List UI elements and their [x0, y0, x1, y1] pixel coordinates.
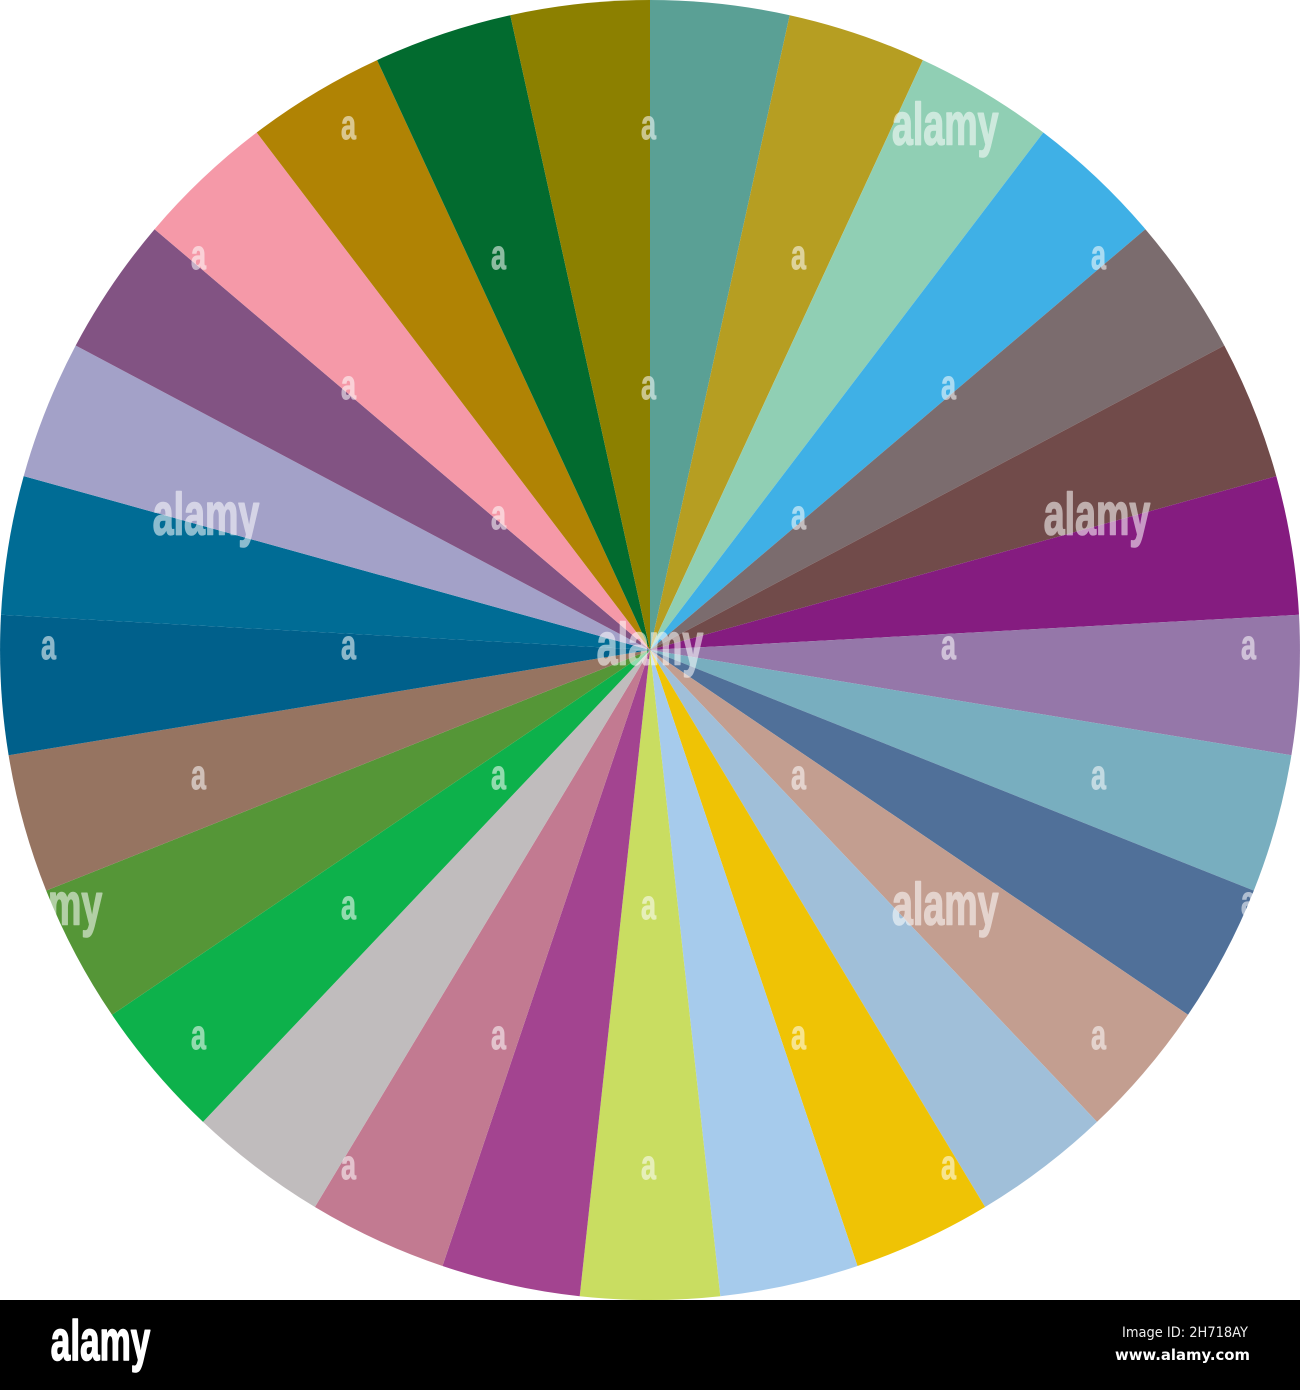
small watermark letters: a [791, 1011, 806, 1058]
small watermark letters: a [941, 621, 956, 668]
small watermark letters: a [941, 1141, 956, 1188]
small watermark letters [41, 101, 1256, 1188]
small watermark letters: a [791, 491, 806, 538]
small watermark letters: a [1091, 231, 1106, 278]
large watermark wordmarks: alamy [0, 872, 102, 938]
small watermark letters: a [641, 101, 656, 148]
small watermark letters: a [791, 231, 806, 278]
large watermark wordmarks: alamy [892, 872, 999, 938]
small watermark letters: a [641, 361, 656, 408]
small watermark letters: a [341, 361, 356, 408]
small watermark letters: a [941, 361, 956, 408]
large watermark wordmarks: alamy [1044, 482, 1150, 548]
large watermark wordmarks: alamy [892, 92, 999, 158]
large watermark wordmarks [0, 92, 1150, 938]
small watermark letters: a [491, 1011, 506, 1058]
website url: www.alamy.com [1115, 1346, 1250, 1364]
small watermark letters: a [341, 881, 356, 928]
small watermark letters: a [491, 491, 506, 538]
small watermark letters: a [491, 751, 506, 798]
small watermark letters: a [491, 231, 506, 278]
small watermark letters: a [641, 1141, 656, 1188]
large watermark wordmarks: alamy [153, 482, 259, 548]
small watermark letters: a [1091, 751, 1106, 798]
small watermark letters: a [341, 1141, 356, 1188]
image id: Image ID: 2H718AY [1122, 1325, 1248, 1341]
small watermark letters: a [191, 751, 206, 798]
small watermark letters: a [341, 101, 356, 148]
small watermark letters: a [41, 621, 56, 668]
footer bar [0, 1300, 1300, 1390]
small watermark letters: a [1241, 621, 1256, 668]
small watermark letters: a [341, 621, 356, 668]
small watermark letters: a [1241, 877, 1256, 924]
small watermark letters: a [791, 751, 806, 798]
footer logo: alamy [51, 1309, 150, 1373]
small watermark letters: a [1091, 1011, 1106, 1058]
small watermark letters: a [191, 1011, 206, 1058]
small watermark letters: a [641, 881, 656, 928]
large watermark wordmarks: alamy [597, 612, 703, 678]
small watermark letters: a [191, 231, 206, 278]
